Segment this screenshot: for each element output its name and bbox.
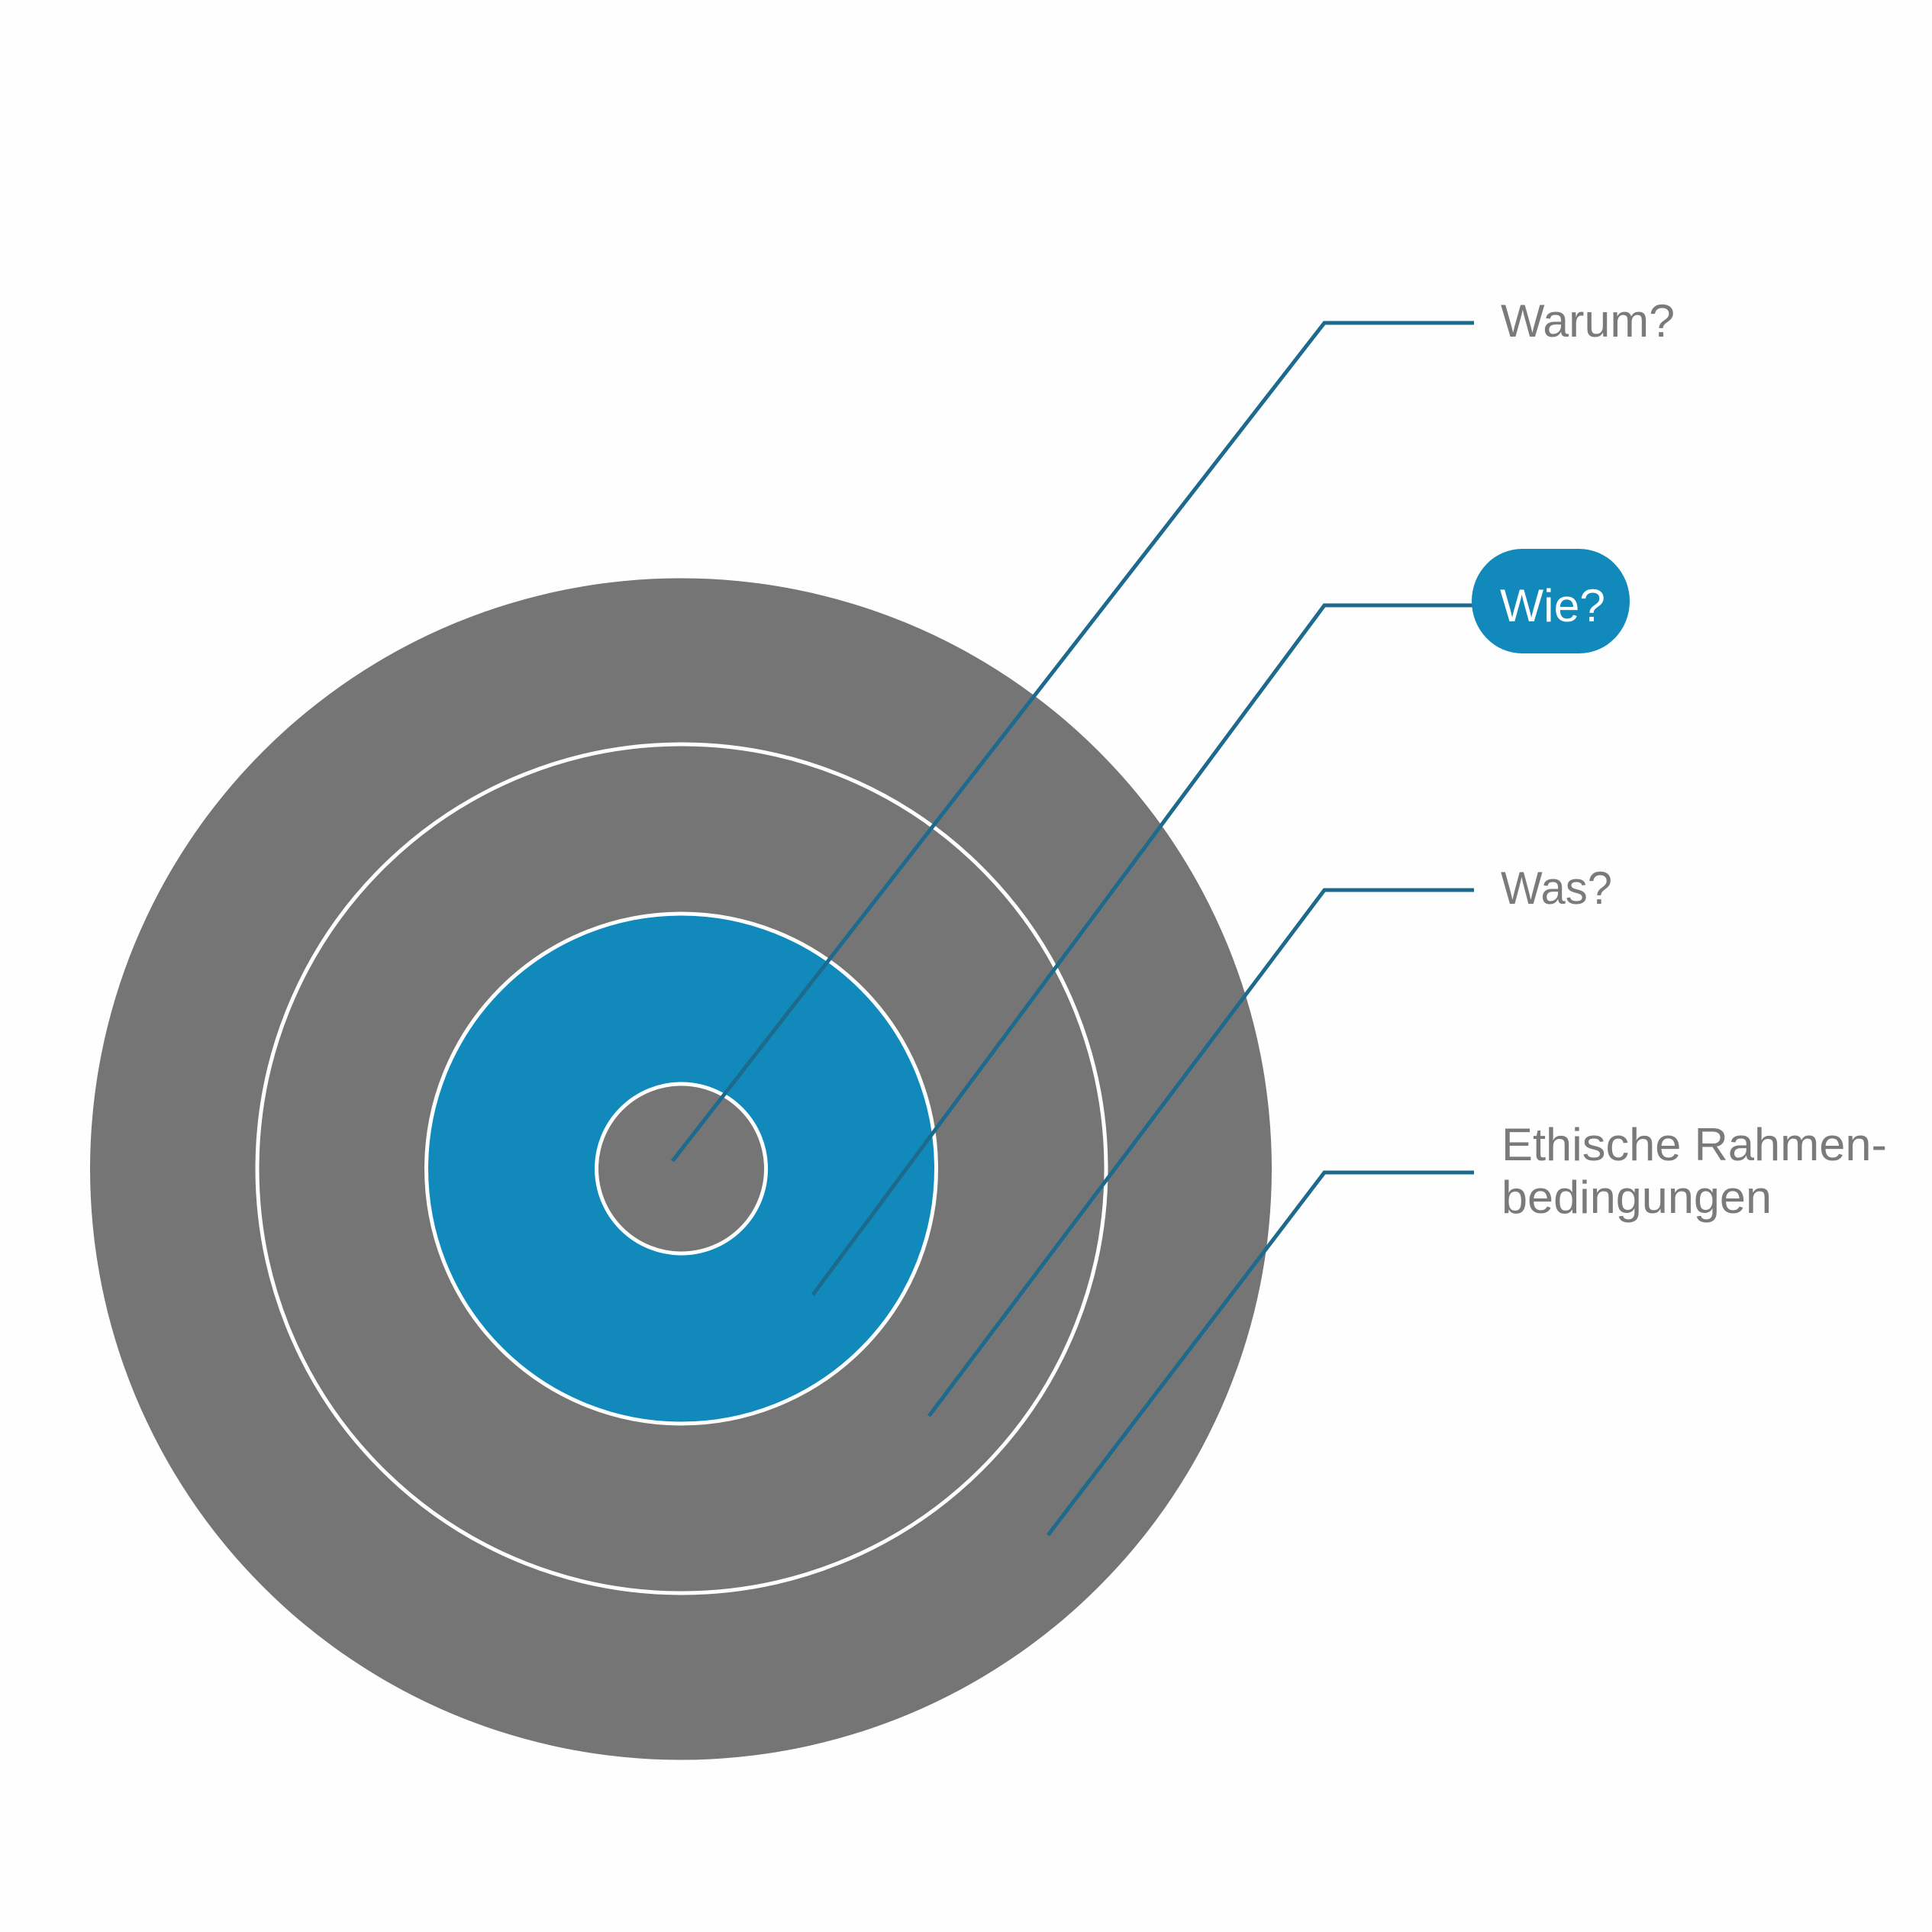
- core circle: Warum: [597, 1084, 766, 1253]
- leader line: Wie: [813, 605, 1474, 1295]
- leader line: Was: [929, 890, 1474, 1416]
- pill: Wie: [1472, 549, 1630, 653]
- label: Warum: Warum?: [1501, 295, 1675, 347]
- leader line: Ethische Rahmenbedingungen: [1048, 1172, 1474, 1535]
- leader line: Warum: [672, 323, 1474, 1161]
- label line 1: Ethische Rahmen-: [1501, 1119, 1887, 1170]
- label line 2: bedingungen: [1501, 1172, 1772, 1223]
- label: Was: Was?: [1501, 863, 1612, 914]
- label: Wie: Wie?: [1500, 580, 1605, 631]
- pill background: [1472, 549, 1630, 653]
- ring: Was: [257, 744, 1106, 1593]
- outer circle: ethical framework: [90, 579, 1272, 1760]
- label: Ethische Rahmenbedingungen: [1501, 1119, 1887, 1223]
- ring: Wie (highlighted): [426, 914, 936, 1424]
